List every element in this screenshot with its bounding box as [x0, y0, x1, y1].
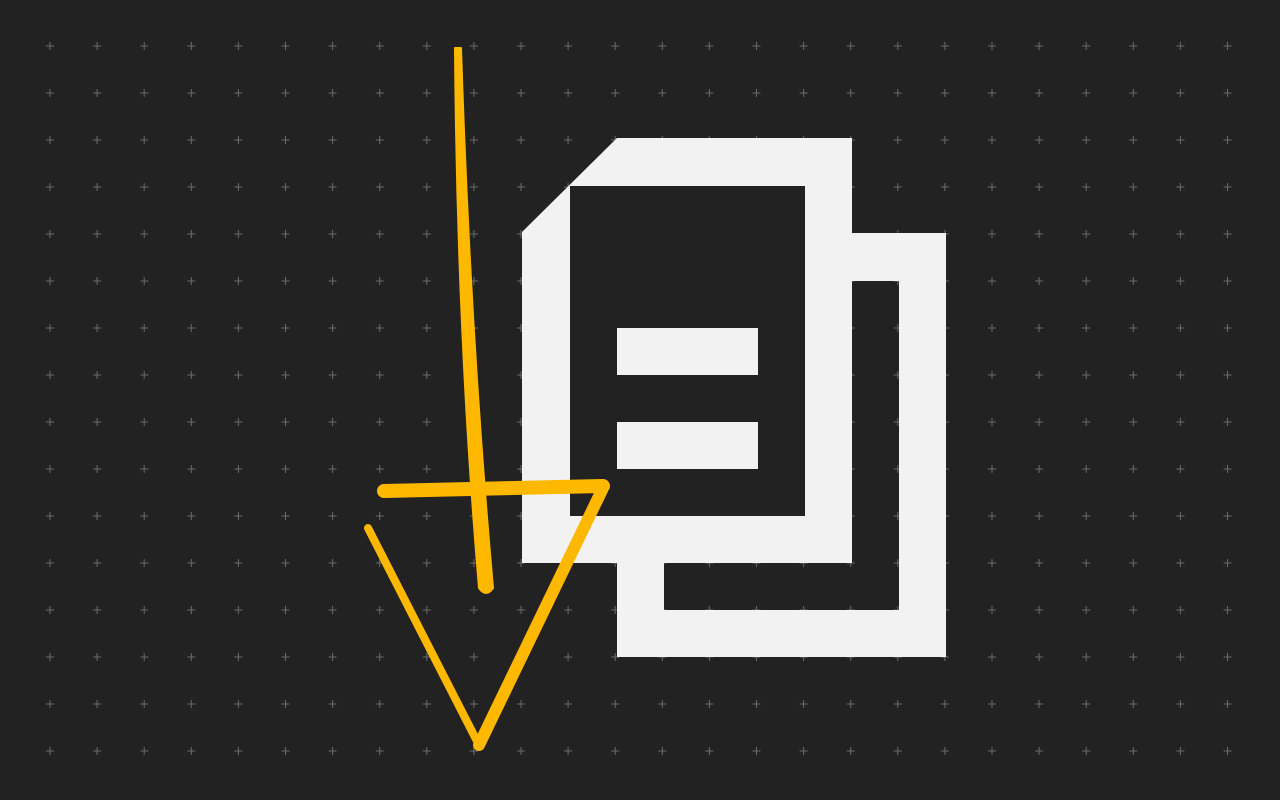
- front document: [522, 138, 852, 563]
- text line 2: [617, 422, 758, 469]
- back document: [617, 233, 946, 657]
- arrow: hand-drawn down arrow: [368, 48, 603, 745]
- icon: documents: [522, 138, 946, 657]
- text line 1: [617, 328, 758, 375]
